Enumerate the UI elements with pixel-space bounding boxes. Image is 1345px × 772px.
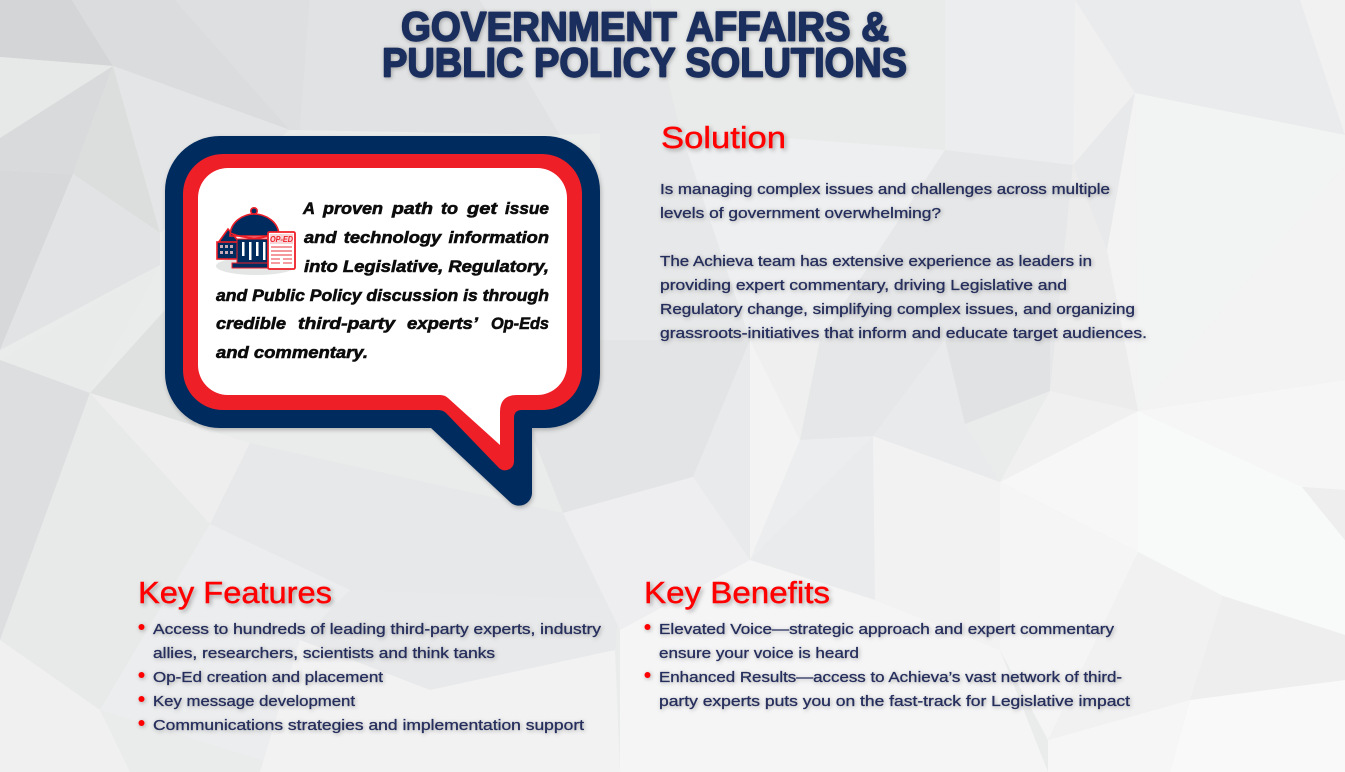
list: key benefits: ensure your voice is heard: [659, 645, 859, 662]
callout text: credible: [216, 314, 286, 333]
heading: Solution: Solution: [661, 120, 786, 155]
callout text: to: [441, 199, 458, 218]
callout text: third-party: [298, 314, 397, 333]
callout text: A: [302, 199, 315, 218]
text block: solution paragraphs: [660, 181, 1147, 342]
text block: solution paragraphs: Regulatory change, simplifying complex issues, and organizing: [660, 301, 1135, 318]
callout text: and technology information: [304, 228, 549, 247]
list: key benefits: party experts puts you on the fast-track for Legislative impact: [659, 693, 1131, 710]
callout text: [216, 199, 549, 362]
callout text: and Public Policy discussion is through: [216, 286, 549, 305]
title: GOVERNMENT AFFAIRS &: [401, 4, 889, 50]
speech bubble navy outer shape: [165, 136, 600, 506]
callout text: experts’: [407, 314, 478, 333]
heading: Key Features: Key Features: [138, 575, 332, 610]
callout text: into Legislative, Regulatory,: [304, 257, 549, 276]
title: [382, 4, 907, 86]
list: key features: allies, researchers, scientists and think tanks: [153, 645, 495, 662]
callout text: Op-Eds: [491, 314, 549, 333]
list: key benefits: Elevated Voice—strategic approach and expert commentary: [659, 621, 1115, 638]
text block: solution paragraphs: providing expert commentary, driving Legislative and: [660, 277, 1067, 294]
callout text: and commentary.: [216, 343, 368, 362]
callout text: get: [466, 199, 499, 218]
list: key benefits: Enhanced Results—access to Achieva’s vast network of third-: [659, 669, 1122, 686]
title: PUBLIC POLICY SOLUTIONS: [382, 40, 907, 86]
list: key features: Communications strategies and implementation support: [153, 717, 585, 734]
heading: Key Benefits: Key Benefits: [644, 575, 830, 610]
panel: speech bubble callout: [165, 136, 600, 506]
list: key features: Access to hundreds of leading third-party experts, industry: [153, 621, 602, 638]
icon: capitol dome with op-ed newspaper: OP-ED: [270, 235, 293, 244]
text block: solution paragraphs: Is managing complex issues and challenges across multiple: [660, 181, 1110, 198]
text block: solution paragraphs: grassroots-initiatives that inform and educate target audiences.: [660, 325, 1147, 342]
text block: solution paragraphs: levels of government overwhelming?: [660, 205, 941, 222]
icon: capitol dome with op-ed newspaper: [216, 208, 296, 275]
callout text: issue: [505, 199, 549, 218]
list: key features: Op-Ed creation and placement: [153, 669, 384, 686]
list: key benefits: [644, 621, 1131, 710]
list: key features: Key message development: [153, 693, 356, 710]
speech bubble red ring: [183, 154, 582, 470]
callout text: path: [391, 199, 433, 218]
speech bubble white interior: [198, 168, 567, 445]
list: key features: [138, 621, 602, 734]
text block: solution paragraphs: The Achieva team has extensive experience as leaders in: [660, 253, 1092, 270]
callout text: proven: [322, 199, 383, 218]
